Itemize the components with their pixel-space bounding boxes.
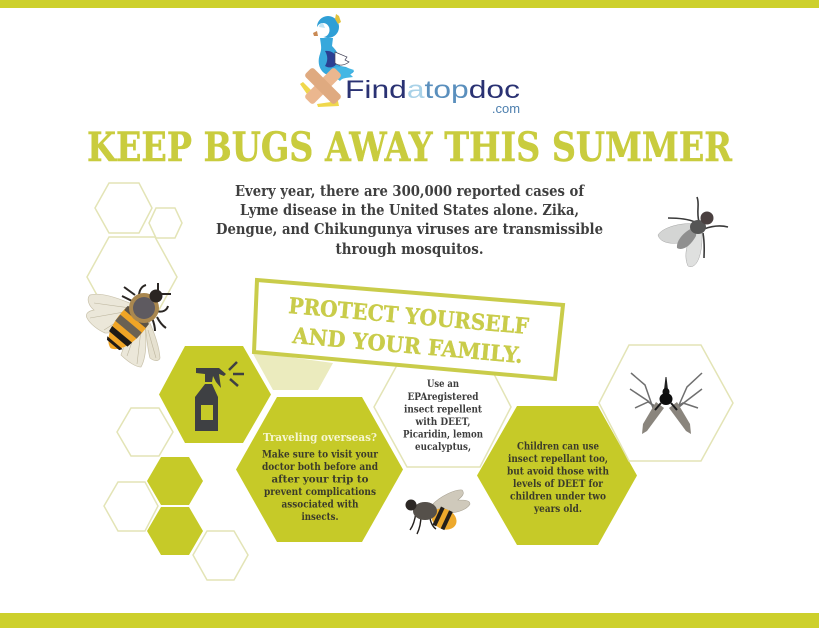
intro text: Every year, there are 300,000 reported cases of xyxy=(235,182,585,200)
bottom bar xyxy=(0,613,819,628)
panel: EPA repellent xyxy=(374,347,511,467)
text: repellent advice: with DEET, xyxy=(415,416,470,428)
bee legs xyxy=(122,283,171,331)
text: children advice: years old. xyxy=(533,503,582,515)
duck legs xyxy=(300,82,339,107)
text: repellent advice: EPAregistered xyxy=(408,391,479,403)
banner heading line 2: AND YOUR FAMILY. xyxy=(290,323,524,369)
text: children advice: Children can use xyxy=(517,440,599,452)
bee wing veins xyxy=(90,303,156,364)
intro text: through mosquitos. xyxy=(336,240,484,258)
text: children advice xyxy=(507,440,609,515)
small bee abdomen xyxy=(428,504,460,534)
text: repellent advice: eucalyptus, xyxy=(415,441,471,453)
intro text xyxy=(216,182,603,258)
bee thorax and head xyxy=(129,293,159,323)
panel: spray hexagon xyxy=(159,346,271,443)
banner heading line 1: PROTECT YOURSELF xyxy=(287,293,530,340)
text: children advice: levels of DEET for xyxy=(513,478,603,490)
duck body xyxy=(313,14,354,81)
bee wings xyxy=(86,294,160,367)
decorative outline hexagons, left xyxy=(87,183,248,580)
text: travel advice: associated with xyxy=(282,498,359,510)
small bee thorax and head xyxy=(413,502,437,520)
top bar xyxy=(0,0,819,8)
banner: protect yourself xyxy=(254,280,563,379)
intro text: Dengue, and Chikungunya viruses are transmissible xyxy=(216,220,603,238)
banner shadow xyxy=(252,352,333,390)
text: travel advice: prevent complications xyxy=(264,486,376,498)
heading: traveling overseas: Traveling overseas? xyxy=(263,430,377,444)
panel: traveling overseas xyxy=(236,397,403,542)
text: children advice: children under two xyxy=(510,490,606,502)
small filled hexagons xyxy=(147,457,203,555)
text: children advice: insect repellant too, xyxy=(508,453,608,465)
icon: mosquito xyxy=(630,373,702,434)
text: children advice: but avoid those with xyxy=(507,466,609,478)
bandage xyxy=(293,56,353,116)
text: repellent advice: Use an xyxy=(427,378,459,390)
intro text: Lyme disease in the United States alone. Zika, xyxy=(240,201,579,219)
.com: .com xyxy=(492,101,520,116)
icon: large bee xyxy=(86,283,171,367)
icon: fly xyxy=(658,197,728,267)
small bee legs xyxy=(410,512,436,534)
text: travel advice: insects. xyxy=(302,511,338,523)
panel: mosquito hexagon xyxy=(599,345,733,461)
bee abdomen xyxy=(99,303,152,357)
icon: small bee xyxy=(406,490,470,534)
icon: spray bottle xyxy=(195,362,244,431)
wordmark: Find atop doc xyxy=(345,76,520,104)
text: travel advice: after your trip to xyxy=(272,474,368,486)
text: travel advice: Make sure to visit your xyxy=(262,448,378,460)
text: travel advice: doctor both before and xyxy=(262,461,379,473)
text: repellent advice: insect repellent xyxy=(404,404,482,416)
text: repellent advice: Picaridin, lemon xyxy=(403,428,483,440)
small bee wings xyxy=(432,490,470,513)
logo: Findatopdoc duck xyxy=(293,14,520,116)
text: travel advice xyxy=(262,448,379,523)
panel: children advice xyxy=(477,406,637,545)
text: repellent advice xyxy=(403,378,483,453)
